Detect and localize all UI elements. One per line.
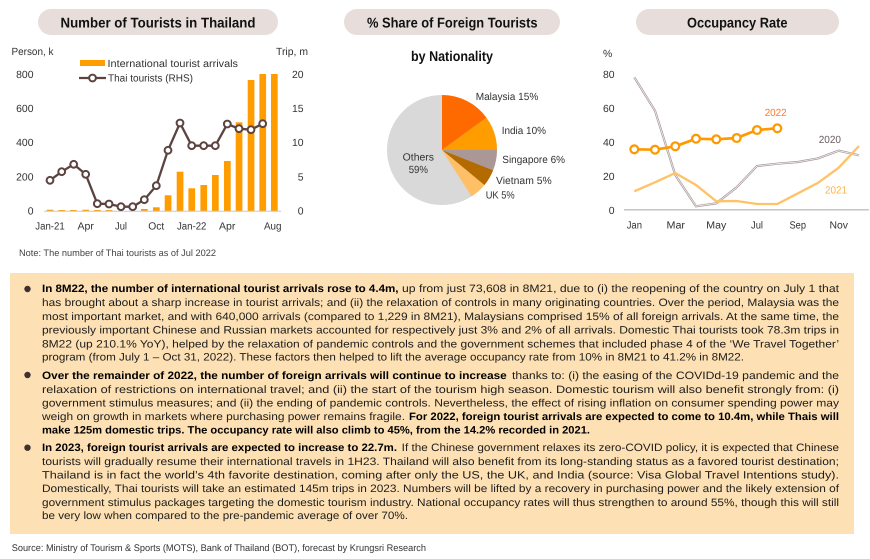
x axis labels [35, 222, 282, 232]
legend: International tourist arrivals [108, 59, 238, 70]
panel: commentary [10, 273, 854, 534]
pie labels: Others [403, 152, 434, 164]
paragraph 1: up from just 73,608 in 8M21, due to (i) the reopening of the country on July 1 that [402, 283, 839, 295]
x axis labels: Nov [830, 220, 849, 232]
x axis labels: May [706, 220, 727, 232]
paragraph 3: If the Chinese government relaxes its zero-COVID policy, it is expected that Chinese [402, 442, 839, 454]
paragraph 1: most important market, and with 640,000 arrivals (compared to 1,229 in 8M21), Malaysians comprised 15% of all foreign arrivals. At the same time, the [42, 311, 839, 323]
paragraph 2: relaxation of restrictions on international travel; and (ii) the start of the tourism high season. Domestic tourism will also benefit strongly from: (i) [42, 384, 839, 396]
pie labels: Malaysia 15% [476, 92, 538, 103]
paragraph 1: In 8M22, the number of international tourist arrivals rose to 4.4m, [42, 283, 399, 295]
source line: Source: Ministry of Tourism & Sports (MOTS), Bank of Thailand (BOT), forecast by Krungsri Research [12, 543, 426, 554]
x axis labels: Apr [219, 222, 236, 232]
pie chart [387, 95, 497, 205]
left axis labels: 0 [28, 206, 34, 218]
subheading: by Nationality: by Nationality [411, 49, 493, 65]
paragraph 1: 8M22 (up 210.1% YoY), helped by the relaxation of pandemic controls and the government schemes that included phase 4 of the ‘We Travel Together’ [42, 338, 839, 350]
y axis labels: 40 [603, 138, 615, 149]
right axis unit: Trip, m [276, 47, 308, 58]
panel: tourists chart [12, 9, 308, 258]
left axis labels [16, 70, 34, 218]
heading: Number of Tourists in Thailand [38, 9, 278, 35]
paragraph 3: government stimulus packages targeting the domestic tourism industry. National occupancy rates will thus strengthen to around 55%, though this will still [42, 497, 839, 509]
paragraph 1: program (from July 1 – Oct 31, 2022). These factors then helped to lift the average occupancy rate from 10% in 8M21 to 41.2% in 8M22. [42, 352, 744, 364]
note: Note: The number of Thai tourists as of Jul 2022 [19, 247, 216, 258]
right axis labels: 0 [298, 206, 304, 218]
paragraph 2: For 2022, foreign tourist arrivals are expected to come to 10.4m, while Thais will [409, 411, 839, 423]
left axis labels: 400 [16, 138, 34, 149]
y axis unit: % [603, 49, 612, 60]
line: 2021 [634, 146, 859, 204]
line: 2022 [630, 124, 781, 154]
series labels: 2020 [819, 135, 841, 146]
right axis labels: 5 [298, 172, 304, 184]
paragraph 3: tourists will gradually resume their international travels in 1H23. Thailand will also benefit from its long-standing status as a favored tourist destination; [42, 456, 839, 468]
x axis labels: Jan [627, 220, 642, 232]
paragraph 2: make 125m domestic trips. The occupancy rate will also climb to 45%, from the 14.2% recorded in 2021. [42, 424, 590, 436]
x axis labels: Apr [78, 222, 94, 232]
x axis labels: Aug [264, 222, 282, 232]
line: 2020 [634, 77, 859, 206]
x axis labels: Sep [790, 220, 806, 232]
right axis labels: 20 [292, 70, 304, 81]
paragraph 3 [24, 442, 839, 522]
bars: international tourist arrivals [47, 74, 278, 211]
x axis labels: Jan-22 [177, 222, 207, 232]
x axis labels: Mar [666, 220, 686, 232]
pie labels: UK 5% [486, 190, 515, 202]
left axis labels: 600 [16, 104, 34, 115]
left axis labels: 800 [16, 70, 34, 81]
pie labels: Singapore 6% [502, 155, 565, 166]
pie labels [403, 92, 565, 202]
y axis labels [603, 70, 615, 217]
x axis labels: Jul [751, 220, 763, 232]
paragraph 3: Thailand is in fact the world’s 4th favorite destination, coming after only the US, the UK, and India (source: Visa Global Travel Intentions study). [42, 470, 839, 482]
right axis labels: 15 [292, 104, 304, 115]
series labels: 2021 [825, 186, 847, 196]
paragraph 2: Over the remainder of 2022, the number of foreign arrivals will continue to increase [42, 370, 507, 382]
paragraph 2: thanks to: (i) the easing of the COVIDd-19 pandemic and the [512, 370, 839, 382]
panel: occupancy rate [603, 9, 869, 232]
x axis labels [627, 220, 849, 232]
panel: share of foreign tourists [344, 9, 565, 205]
x axis labels: Jan-21 [35, 222, 65, 232]
pie labels: Vietnam 5% [496, 176, 552, 187]
pie labels: 59% [409, 165, 428, 176]
y axis labels: 0 [609, 206, 615, 217]
paragraph 1: previously important Chinese and Russian markets accounted for respectively just 3% and 2% of all arrivals. Domestic Thai tourists took 78.3m trips in [42, 324, 839, 336]
heading: % Share of Foreign Tourists: % Share of Foreign Tourists [367, 16, 538, 32]
series labels [765, 108, 847, 196]
right axis labels: 10 [292, 138, 304, 149]
legend [79, 59, 238, 84]
heading: Occupancy Rate [636, 9, 839, 35]
legend: Thai tourists (RHS) [108, 74, 193, 84]
right axis labels [292, 70, 304, 218]
paragraph 1: has brought about a sharp increase in tourist arrivals; and (ii) the relaxation of controls in many originating countries. Over the period, Malaysia was the [42, 297, 839, 309]
series labels: 2022 [765, 108, 787, 119]
paragraph 2 [24, 370, 840, 436]
paragraph 2: government stimulus measures; and (ii) the ending of pandemic controls. Nevertheless, the effect of rising inflation on consumer spending power may [42, 398, 840, 410]
y axis labels: 80 [603, 70, 615, 81]
pie labels: India 10% [502, 126, 546, 137]
heading: Occupancy Rate: Occupancy Rate [687, 16, 788, 32]
paragraph 2: weigh on growth in markets where purchasing power remains fragile. [41, 411, 405, 423]
left axis labels: 200 [16, 172, 34, 184]
paragraph 3: be very low when compared to the pre-pandemic average of over 70%. [42, 510, 408, 522]
paragraph 3: In 2023, foreign tourist arrivals are expected to increase to 22.7m. [42, 442, 397, 454]
y axis labels: 20 [603, 172, 615, 183]
paragraph 1 [24, 283, 839, 364]
heading: Number of Tourists in Thailand: Number of Tourists in Thailand [60, 16, 256, 32]
x axis labels: Oct [148, 222, 164, 232]
y axis labels: 60 [603, 104, 615, 115]
heading: % Share of Foreign Tourists [344, 9, 560, 35]
line: Thai tourists [47, 120, 266, 210]
paragraph 3: Domestically, Thai tourists will take an estimated 145m trips in 2023. Numbers will be lifted by a recovery in purchasing power and the likely extension of [42, 483, 839, 495]
left axis unit: Person, k [12, 47, 54, 58]
x axis labels: Jul [115, 222, 127, 232]
